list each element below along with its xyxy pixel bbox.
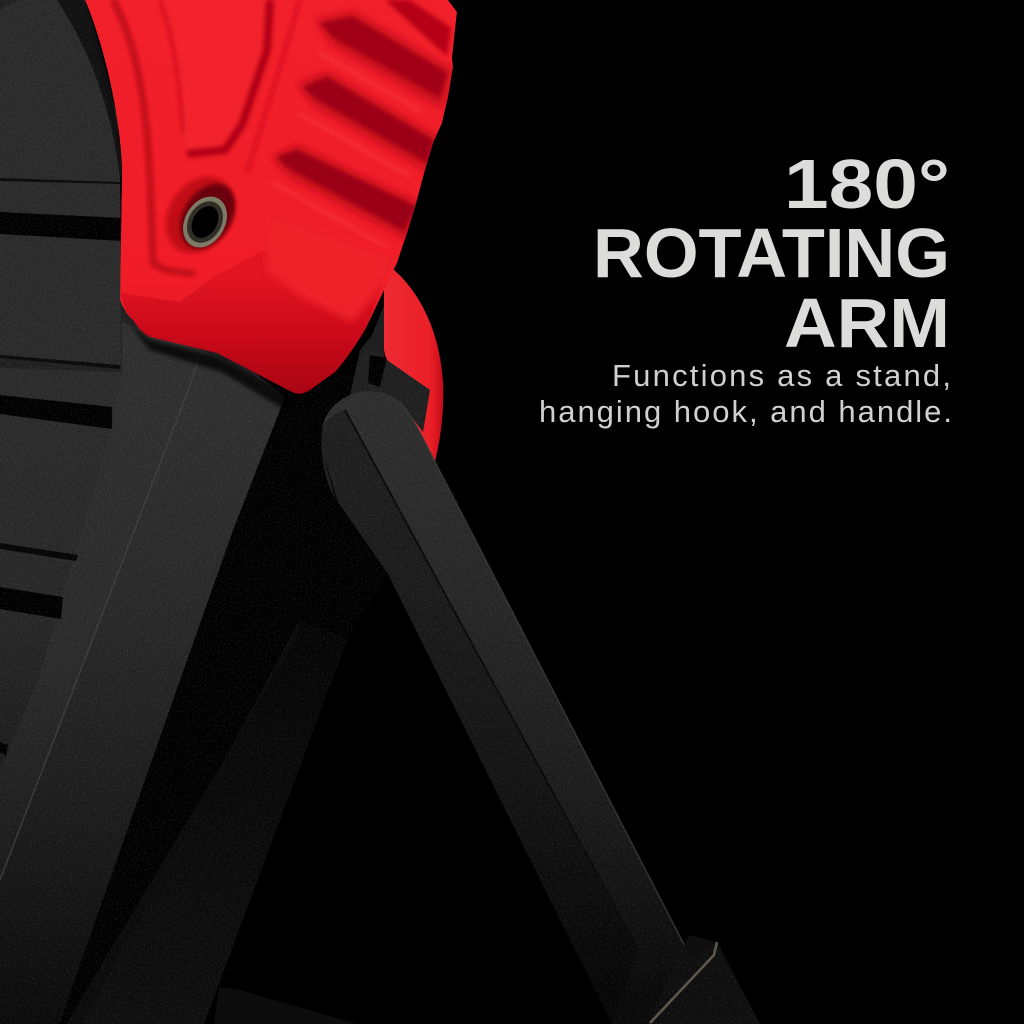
grip groove 4 soft	[272, 145, 422, 240]
inner recess panel	[0, 368, 122, 770]
grip groove 2	[320, 17, 447, 97]
description line 2: hanging hook, and handle.	[539, 394, 952, 429]
arm edge highlight	[400, 402, 692, 960]
grill slits	[0, 178, 122, 756]
arm inner fade	[322, 450, 612, 1024]
grip groove 4	[277, 150, 417, 230]
block behind arm	[350, 305, 430, 432]
edge highlight	[0, 355, 200, 880]
grip groove 2 soft	[316, 12, 452, 108]
grip groove 1	[385, 0, 451, 56]
grip groove 3	[303, 77, 433, 163]
bottom base fragment	[214, 987, 357, 1024]
lamp body: black textured housing	[0, 0, 285, 1024]
arm seam	[345, 410, 638, 949]
rib highlights	[272, 52, 422, 248]
arm left-side shading	[321, 410, 638, 1024]
screw	[183, 196, 227, 248]
handle contact shadow	[128, 322, 300, 410]
border strip	[0, 322, 215, 880]
screw recess	[164, 174, 238, 256]
heading	[593, 145, 950, 362]
lower shaded face	[121, 250, 390, 394]
heading line 1: 180°	[784, 145, 950, 223]
description line 1: Functions as a stand,	[612, 358, 951, 393]
recess rim	[164, 174, 235, 256]
textured lower panel	[0, 355, 285, 1024]
rotating arm	[321, 391, 692, 1024]
texture grain	[0, 0, 758, 1024]
upper panel	[0, 0, 121, 365]
dark strip beside the handle	[57, 0, 122, 178]
foot bracket	[648, 935, 760, 1024]
heading line 3: ARM	[784, 284, 950, 362]
lit end block	[266, 250, 398, 322]
recess shadow side	[178, 181, 238, 252]
diagonal ridge line	[247, 0, 300, 173]
rear red disc	[384, 262, 443, 470]
inner contour groove	[113, 0, 195, 274]
stand bar in shadow	[82, 619, 347, 1024]
recess shadow	[187, 0, 270, 154]
hex socket	[192, 206, 218, 238]
recessed face	[160, 0, 268, 150]
recess left line	[160, 0, 183, 133]
grip groove 3 soft	[298, 72, 438, 172]
description	[539, 358, 952, 429]
heading line 2: ROTATING	[593, 214, 950, 292]
bar side face	[66, 619, 300, 1024]
red handle	[85, 0, 457, 394]
